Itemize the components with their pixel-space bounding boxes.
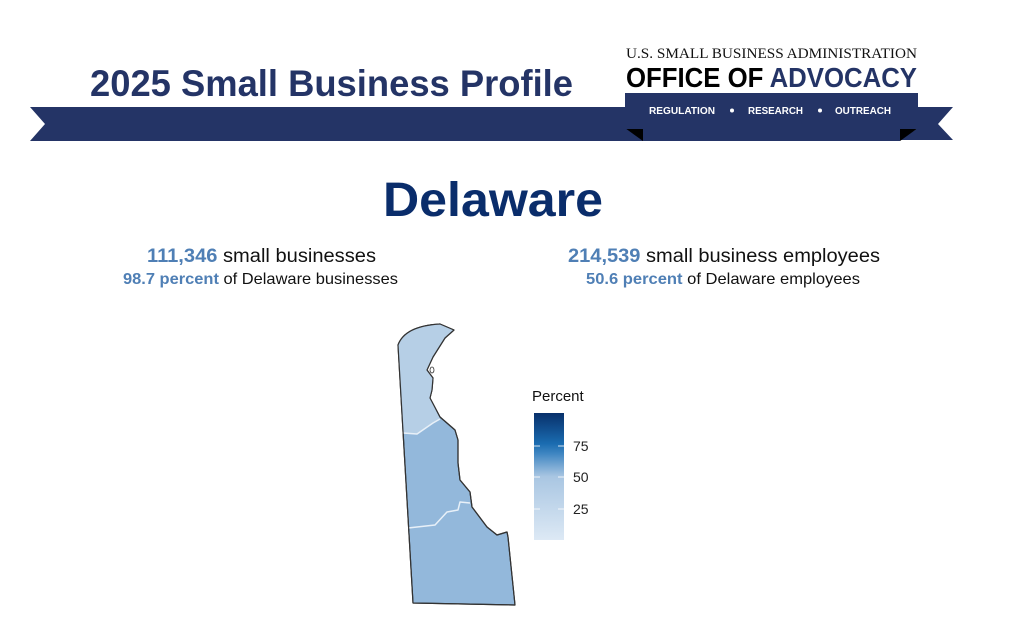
stat: small businesses: 98.7 percent of Delaware businesses bbox=[123, 271, 398, 288]
logo: office of advocacy: REGULATION bbox=[649, 106, 715, 117]
stat: employees bbox=[568, 246, 880, 288]
banner ribbon bbox=[30, 93, 953, 141]
stat: employees: 214,539 small business employees bbox=[568, 246, 880, 267]
logo: office of advocacy: OUTREACH bbox=[835, 106, 891, 117]
stat: employees: 50.6 percent of Delaware employees bbox=[586, 271, 860, 288]
stat: small businesses: 111,346 small businesses bbox=[147, 246, 376, 267]
logo: office of advocacy: OFFICE OF ADVOCACY bbox=[626, 62, 917, 93]
state heading: Delaware bbox=[383, 174, 603, 227]
map: Delaware counties bbox=[398, 324, 515, 605]
logo: office of advocacy: U.S. SMALL BUSINESS ADMINISTRATION bbox=[626, 46, 917, 62]
legend: percent: Percent bbox=[532, 388, 585, 405]
title: 2025 Small Business Profile bbox=[90, 63, 573, 104]
legend: percent: 25 bbox=[573, 501, 589, 517]
legend: percent: 75 bbox=[573, 438, 589, 454]
logo: office of advocacy: RESEARCH bbox=[748, 106, 803, 117]
stat: small businesses bbox=[123, 246, 398, 288]
legend: percent bbox=[532, 388, 589, 540]
legend: percent: 50 bbox=[573, 469, 589, 485]
logo: office of advocacy bbox=[626, 46, 917, 117]
